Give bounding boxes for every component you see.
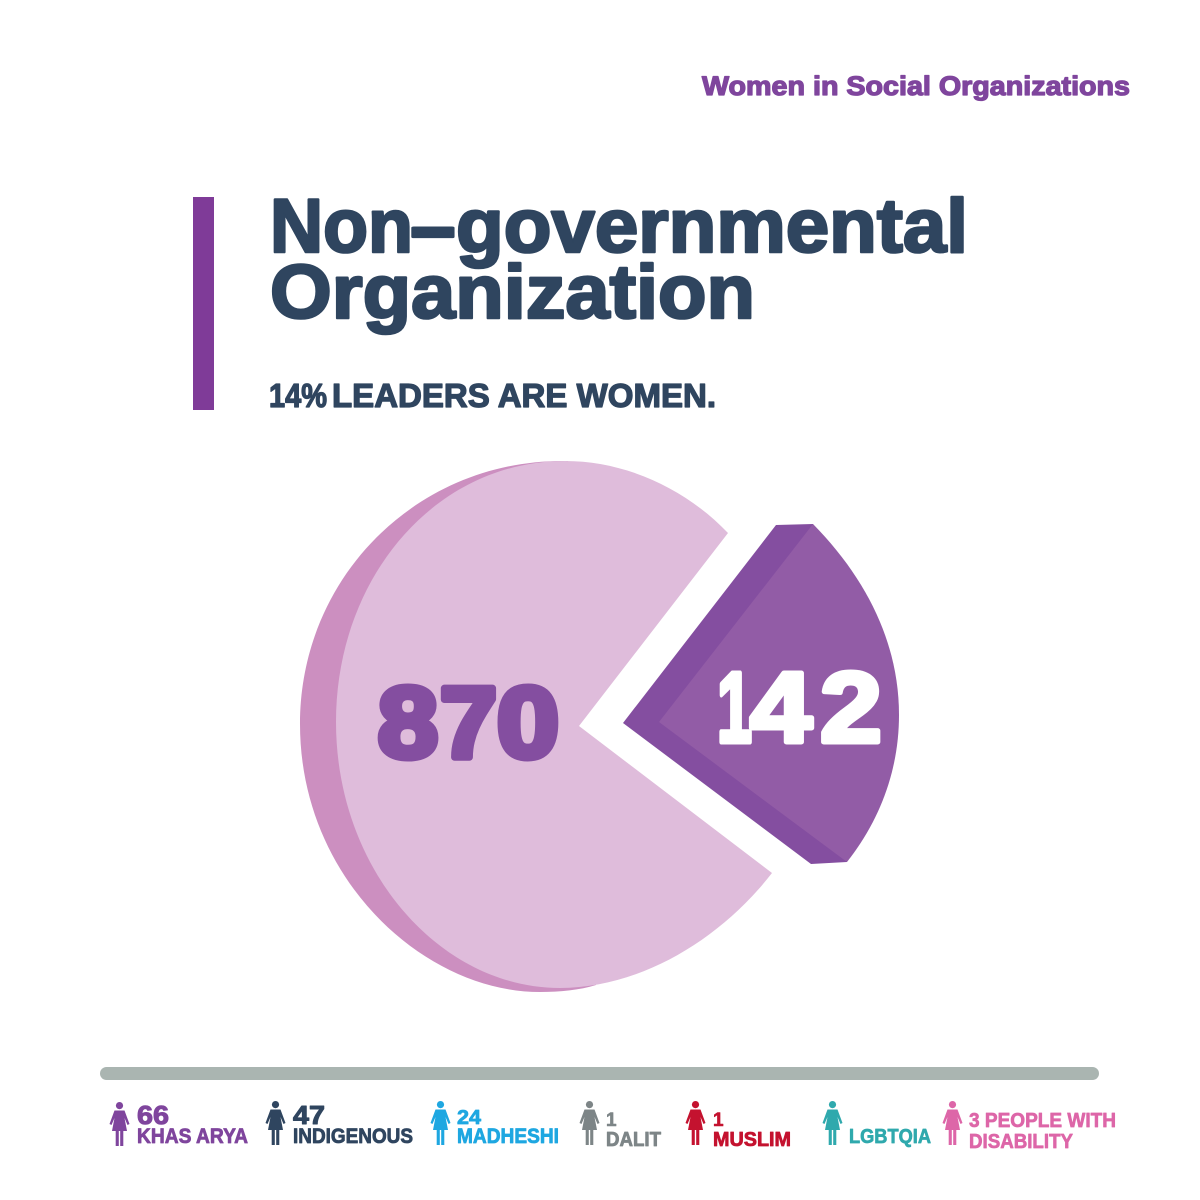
legend: People with disability: 3 PEOPLE WITH [969, 1110, 1116, 1132]
heading: - [408, 184, 458, 269]
legend: Indigenous [266, 1100, 413, 1148]
icon: woman [266, 1101, 286, 1145]
legend: Dalit [580, 1101, 661, 1151]
icon: woman [822, 1101, 842, 1145]
legend: Indigenous: INDIGENOUS [293, 1125, 413, 1148]
heading: Non [270, 184, 413, 269]
legend: LGBTQIA [822, 1101, 931, 1148]
legend: Madheshi: MADHESHI [457, 1125, 559, 1148]
legend: LGBTQIA: LGBTQIA [849, 1126, 931, 1148]
slice label: 870: 7 [440, 667, 497, 779]
legend: Dalit: 1 [606, 1110, 617, 1131]
slice label: 870 [378, 667, 559, 779]
legend: Muslim: MUSLIM [713, 1129, 791, 1151]
series title: Women in Social Organizations [702, 71, 1130, 101]
heading: governmental [456, 184, 968, 269]
icon: woman [942, 1101, 962, 1145]
icon: woman [430, 1101, 450, 1145]
slice label: 870: 0 [497, 667, 559, 779]
legend: Indigenous: 47 [293, 1100, 325, 1130]
slice label: 870: 8 [378, 667, 438, 779]
legend: People with disability: DISABILITY [969, 1131, 1074, 1153]
icon: woman [580, 1101, 600, 1145]
heading [270, 184, 968, 335]
slice label: 142 [717, 652, 882, 764]
pie slice: 870 [336, 461, 772, 988]
slice label: 142: 4 [750, 652, 812, 764]
accent bar [193, 197, 214, 410]
pie side: large slice depth [300, 461, 596, 992]
legend: Khas Arya [110, 1100, 248, 1148]
legend: Madheshi [430, 1101, 559, 1148]
subheading: LEADERS ARE WOMEN. [332, 377, 716, 414]
heading: Organization [270, 250, 755, 335]
slice label: 142: 1 [717, 652, 752, 764]
pie wedge depth: 142 [623, 524, 847, 864]
legend: Madheshi: 24 [457, 1107, 482, 1129]
legend: Muslim: 1 [713, 1110, 724, 1131]
legend: Khas Arya: KHAS ARYA [137, 1125, 248, 1148]
icon: woman [110, 1102, 130, 1146]
icon: woman [686, 1101, 706, 1145]
legend: Dalit: DALIT [606, 1129, 661, 1151]
subheading: 14% [269, 377, 327, 414]
legend: People with disability [942, 1101, 1116, 1153]
divider bar [100, 1067, 1099, 1080]
pie chart [300, 461, 899, 992]
pie slice: 142 [659, 524, 899, 862]
legend: Khas Arya: 66 [137, 1100, 169, 1130]
legend: Muslim [686, 1101, 791, 1151]
slice label: 142: 2 [820, 652, 882, 764]
